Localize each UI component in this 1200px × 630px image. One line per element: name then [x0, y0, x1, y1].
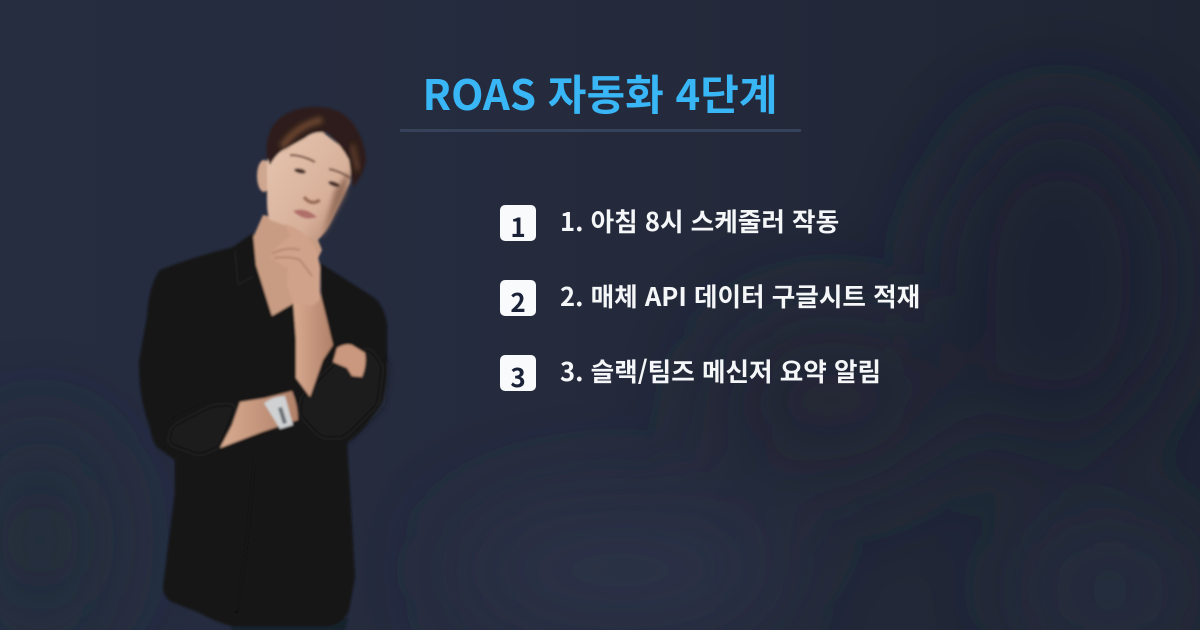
- title underline: [400, 129, 801, 132]
- watch: [264, 396, 293, 429]
- face: [267, 130, 352, 241]
- hair: [267, 107, 366, 187]
- jeans: [228, 618, 348, 630]
- hand on chin: [270, 224, 320, 306]
- shirt folds: [165, 402, 240, 458]
- badge 2: 2: [510, 283, 526, 320]
- upper forearm: [293, 292, 333, 397]
- lower forearm: [220, 391, 298, 448]
- brows and eyes: [290, 155, 350, 178]
- step 3: [500, 352, 881, 395]
- badge 3: 3: [510, 358, 526, 395]
- step 2: [500, 277, 920, 320]
- mouth: [293, 209, 317, 219]
- fingers on arm: [333, 344, 366, 377]
- step 2 label: 2. 매체 API 데이터 구글시트 적재: [560, 277, 920, 314]
- badge 3: [500, 355, 536, 391]
- step 3 label: 3. 슬랙/팀즈 메신저 요약 알림: [560, 352, 881, 389]
- step 1 label: 1. 아침 8시 스케줄러 작동: [560, 202, 839, 239]
- title: ROAS 자동화 4단계: [422, 62, 778, 123]
- badge 2: [500, 280, 536, 316]
- nose: [304, 197, 320, 202]
- shirt: [139, 233, 387, 626]
- step 1: [500, 202, 839, 245]
- neck: [252, 215, 322, 316]
- badge 1: 1: [510, 208, 526, 245]
- ear: [257, 160, 271, 192]
- face shadows: [322, 170, 350, 238]
- badge 1: [500, 205, 536, 241]
